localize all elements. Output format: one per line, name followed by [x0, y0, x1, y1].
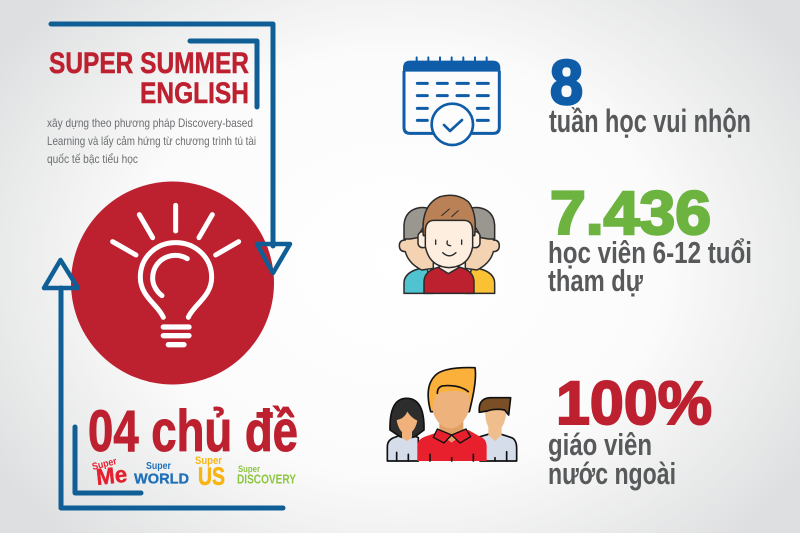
icon: down arrowhead: [257, 244, 290, 273]
logo: Super Us: US: [198, 463, 225, 491]
logo: Super World: WORLD: [134, 472, 189, 488]
man centre face: [433, 391, 470, 428]
man centre shirt: [417, 430, 487, 461]
logo: Super Discovery: DISCOVERY: [237, 472, 297, 486]
stat: 100% teachers: giáo viên: [548, 427, 652, 462]
icon: light bulb: [113, 205, 239, 345]
man right: [479, 398, 517, 461]
logos: four Super themes: [91, 455, 297, 491]
bottom-left bracket arrow: [44, 260, 283, 508]
right student: [465, 207, 499, 293]
red circle with light bulb: [71, 182, 274, 384]
stat: 7.436 students: 7.436: [550, 179, 711, 247]
logo: Super Us: [195, 455, 225, 491]
logo: Super Me: Super: [91, 456, 118, 473]
icon: up arrowhead: [44, 260, 78, 288]
man centre neck: [439, 418, 463, 442]
left student: [399, 207, 433, 293]
description text: xây dựng theo phương pháp Discovery-based: [47, 116, 253, 130]
title: ENGLISH: [140, 77, 249, 110]
logo: Super Discovery: [237, 464, 297, 486]
heading: 04 topics: 04 chủ đề: [88, 399, 298, 464]
stat: 100% teachers: nước ngoài: [548, 456, 676, 491]
stat: 100% teachers: [548, 369, 712, 491]
title: SUPER SUMMER: [49, 47, 249, 80]
logo: Super Us: Super: [195, 455, 223, 467]
icon: group of students: [399, 195, 499, 293]
logo: Super Discovery: Super: [238, 464, 260, 475]
description text: quốc tế bậc tiểu học: [47, 152, 138, 166]
icon: group of teachers: [387, 368, 517, 461]
description text: [47, 116, 256, 166]
stat: 8 weeks: [549, 48, 751, 139]
icon: calendar with check: [403, 57, 500, 145]
stat: 8 weeks: 8: [550, 48, 583, 118]
logo: Super World: Super: [146, 460, 171, 472]
centre student: [418, 195, 480, 293]
logo: Super Me: Me: [95, 461, 128, 490]
woman: [387, 398, 424, 461]
description text: Learning và lấy cảm hứng từ chương trình tú tài: [47, 134, 256, 148]
man centre hair: [428, 368, 476, 412]
stat: 7.436 students: tham dự: [548, 263, 643, 298]
logo: Super World: [134, 460, 189, 488]
title: [49, 47, 249, 110]
stat: 7.436 students: [548, 179, 752, 298]
stat: 100% teachers: 100%: [556, 369, 712, 437]
top-right bracket arrow: [51, 24, 290, 273]
